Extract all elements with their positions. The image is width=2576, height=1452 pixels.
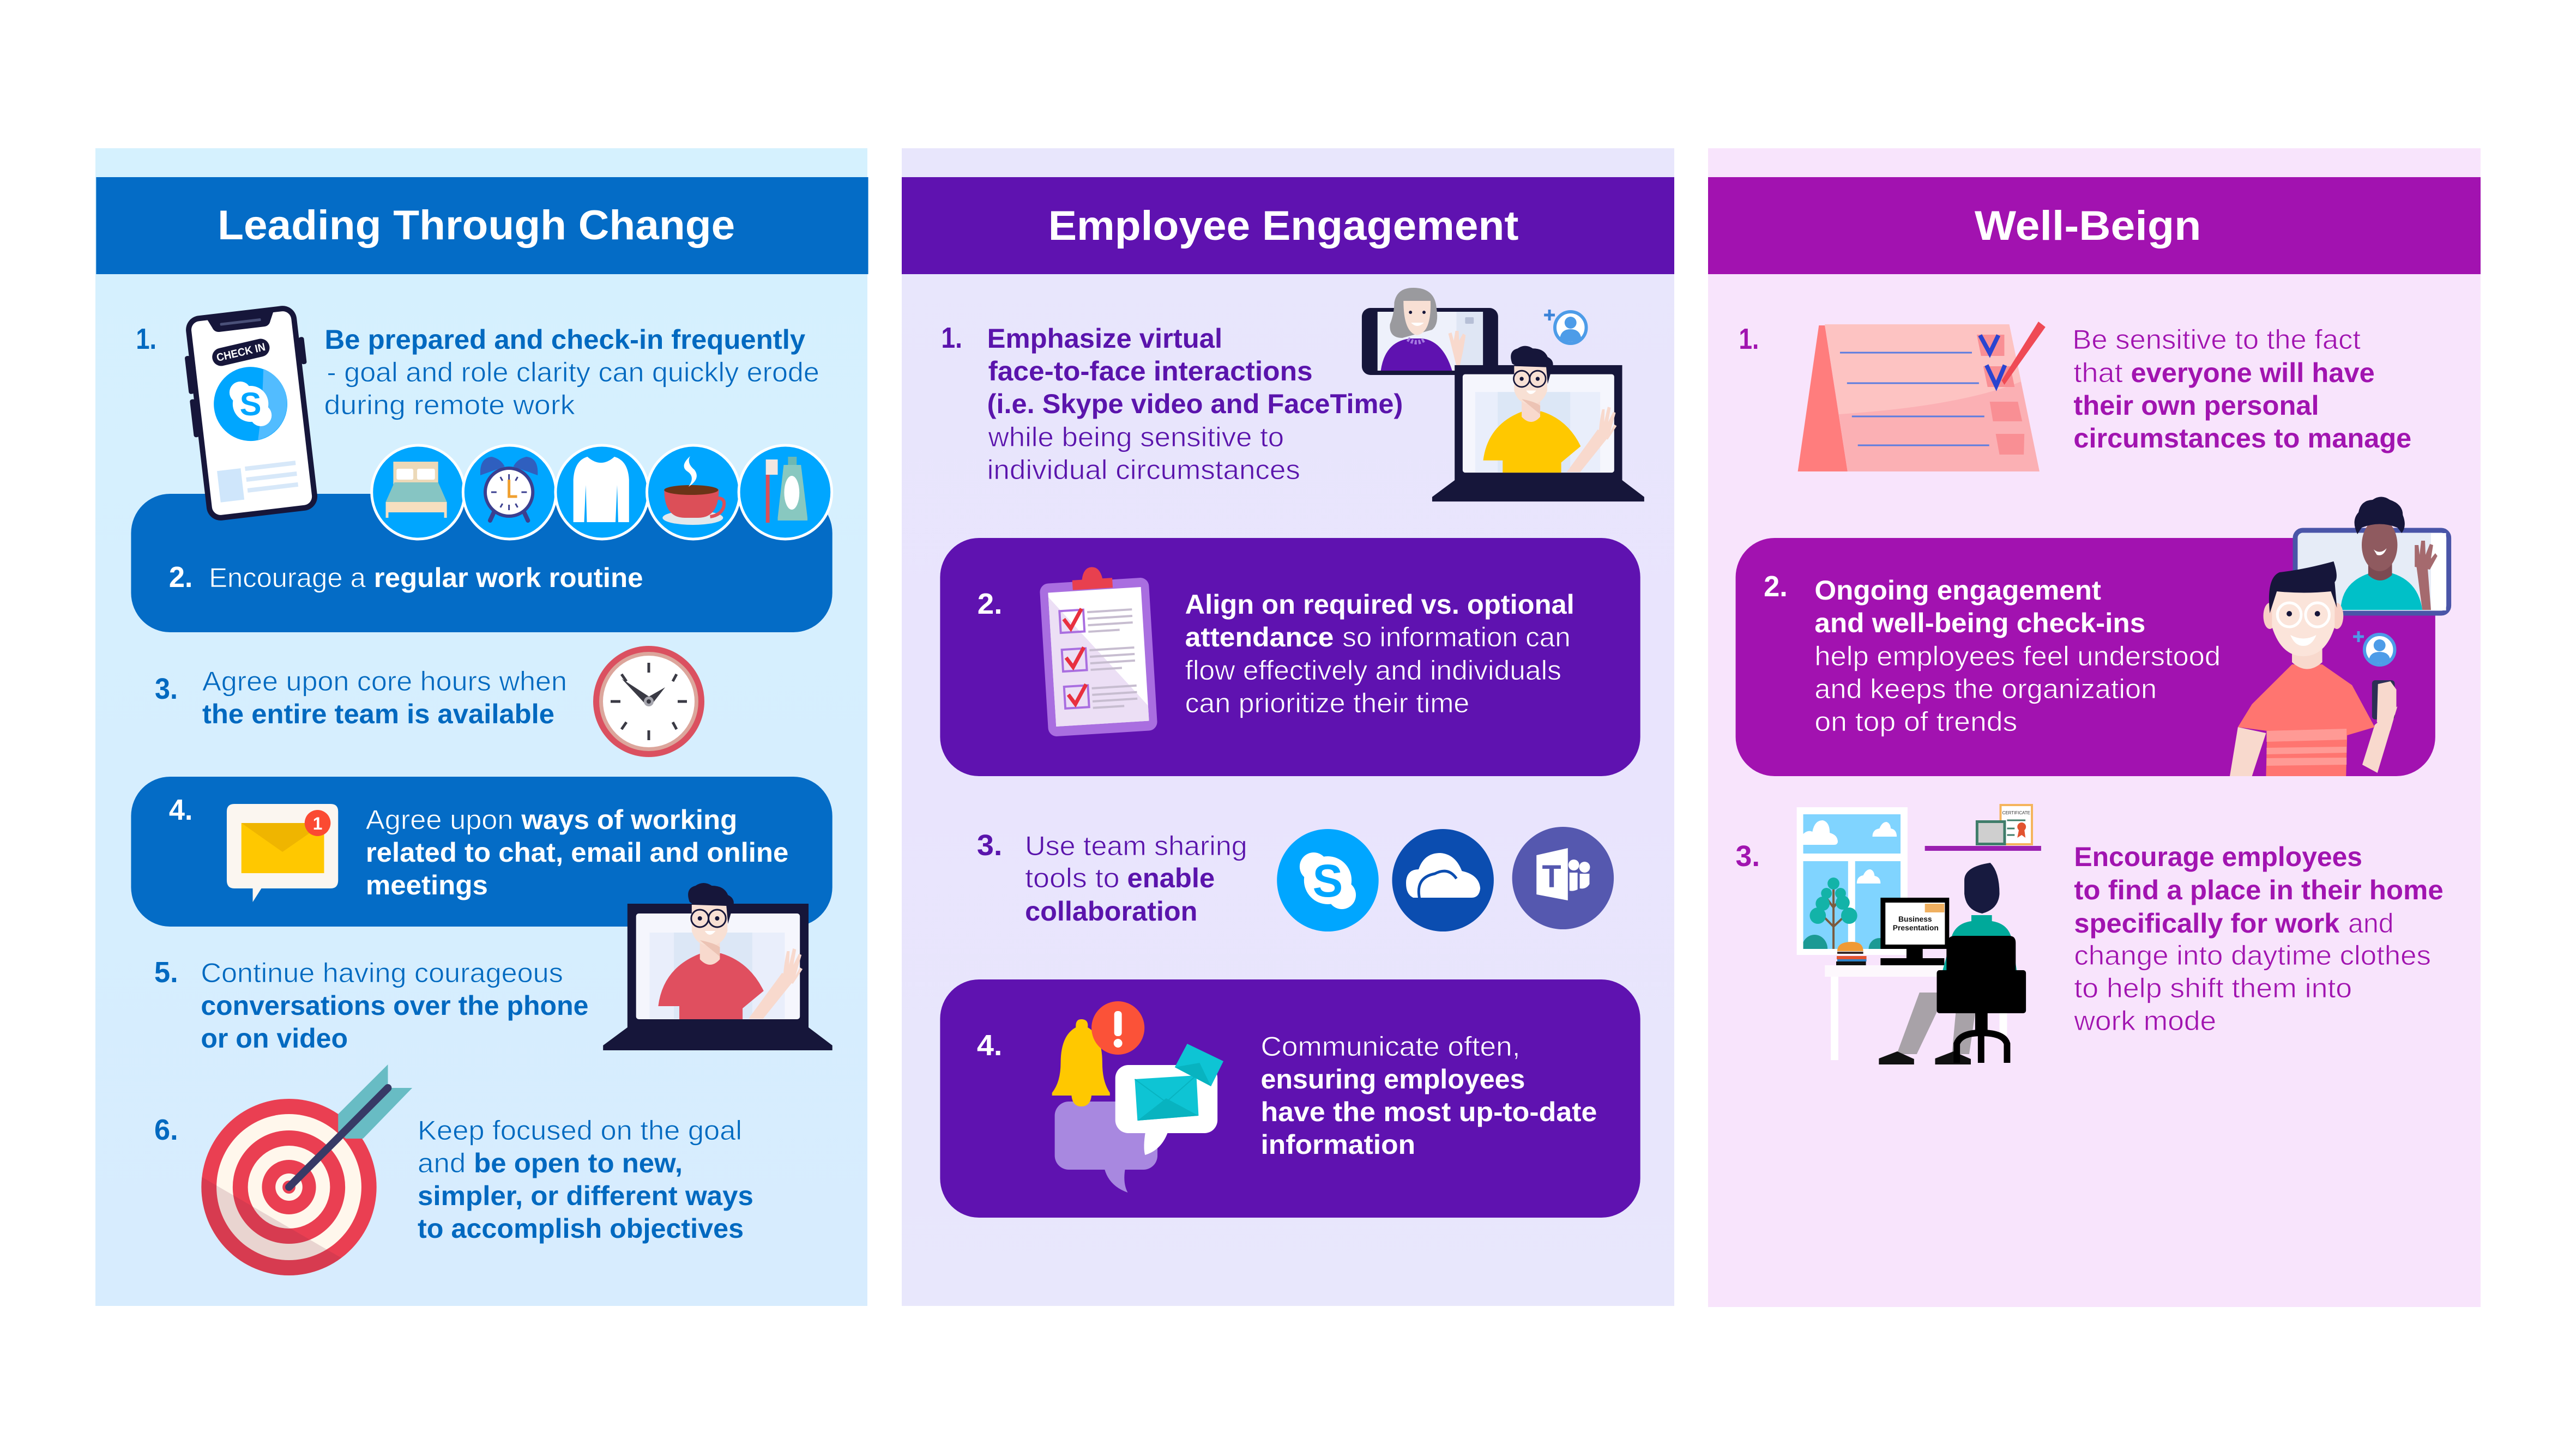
item 1 text (987, 323, 1403, 485)
icon: microsoft teams (1512, 827, 1614, 929)
icon: tablet video call (2295, 497, 2449, 613)
item 2 number: 2. (1764, 570, 1788, 603)
icon: skype (1277, 829, 1379, 931)
item 1 text: while being sensitive to (988, 422, 1284, 452)
item 4 text: related to chat, email and online (366, 837, 788, 868)
item 3 text: specifically for work (2074, 908, 2340, 939)
item 2 text: Encourage a (209, 562, 366, 593)
icon: onedrive (1392, 829, 1494, 931)
item 3 text: and (2348, 908, 2393, 939)
item 4 text (1260, 1031, 1597, 1160)
icon: alarm clock (463, 445, 556, 539)
heading: Leading Through Change (218, 202, 735, 249)
item 2 text: can prioritize their time (1185, 688, 1469, 718)
item 2 text: attendance (1185, 622, 1334, 652)
item 2 text (1185, 589, 1574, 718)
column contents (96, 177, 868, 1278)
item 3 text: change into daytime clothes (2074, 940, 2431, 971)
item 4 number: 4. (977, 1029, 1002, 1062)
item 3 text: the entire team is available (202, 699, 554, 729)
item 3 text (202, 666, 567, 729)
item 5 number: 5. (154, 956, 178, 989)
item 4 text: information (1260, 1129, 1415, 1160)
item 1 text: Be prepared and check-in frequently (324, 324, 805, 355)
item 3 text: to find a place in their home (2074, 875, 2444, 905)
icon: coffee cup (647, 445, 740, 539)
item 2 text: flow effectively and individuals (1185, 655, 1561, 686)
item 2 box (940, 538, 1640, 776)
icon: toothbrush and toothpaste (739, 445, 832, 539)
item 1 text: their own personal (2073, 390, 2319, 421)
item 5 text: or on video (201, 1023, 348, 1054)
item 3 text (1025, 831, 1247, 927)
item 4 text: Communicate often, (1260, 1031, 1521, 1062)
item 1 number: 1. (941, 322, 962, 354)
item 1 text: everyone will have (2131, 358, 2375, 388)
item 1 text: Be sensitive to the fact (2072, 324, 2361, 355)
item 5 text: Continue having courageous (201, 958, 563, 988)
item 1 text: individual circumstances (987, 455, 1300, 485)
item 6 text: simpler, or different ways (418, 1181, 753, 1211)
item 6 text: Keep focused on the goal (418, 1115, 742, 1146)
item 4 text: ways of working (521, 804, 737, 835)
heading: Employee Engagement (1048, 203, 1519, 249)
item 2 text (209, 562, 643, 593)
column contents (1736, 203, 2449, 1064)
item 3 number: 3. (155, 673, 178, 705)
item 2 box (131, 494, 832, 632)
item 1 text (2072, 324, 2411, 453)
icon: email notification: 1 (313, 814, 322, 833)
item 1 text (324, 324, 819, 420)
icon: bed (372, 445, 464, 539)
item 2 box (1736, 538, 2435, 776)
icon: home office scene: CERTIFICATE (2002, 810, 2030, 815)
icon: tablet video call with woman (1362, 288, 1498, 376)
icon: wall clock (593, 646, 704, 757)
column contents (940, 203, 1644, 1218)
item 2 text: and well-being check-ins (1814, 608, 2145, 638)
panel: Well-Being (1708, 148, 2481, 1307)
item 2 text: Ongoing engagement (1814, 575, 2101, 606)
item 6 number: 6. (154, 1114, 178, 1146)
item 3 number: 3. (1736, 840, 1760, 873)
item 4 text: ensuring employees (1260, 1064, 1525, 1094)
item 2 text: and keeps the organization (1814, 674, 2157, 704)
icon: add user (1544, 310, 1586, 343)
header band (1708, 177, 2481, 274)
item 5 text (201, 958, 588, 1054)
item 2 text (1814, 575, 2221, 737)
icon: desk calendar checklist (1798, 322, 2046, 471)
item 4 text (366, 804, 788, 900)
header band (902, 177, 1674, 274)
item 1 text: that (2073, 358, 2123, 388)
item 1 text: (i.e. Skype video and FaceTime) (987, 389, 1403, 419)
icon: microsoft teams: T (1542, 860, 1561, 894)
item 3 text: enable (1127, 863, 1215, 893)
item 4 text: meetings (366, 870, 488, 900)
item 3 text: work mode (2073, 1006, 2216, 1036)
item 3 text: collaboration (1025, 896, 1197, 927)
icon row: daily routine (372, 445, 832, 539)
item 1 text: - goal and role clarity can quickly erode (327, 357, 819, 388)
icon: notifications and messages (1052, 1001, 1223, 1193)
icon: skype: S (1313, 855, 1343, 906)
item 6 text: be open to new, (474, 1148, 683, 1178)
item 1 text: face-to-face interactions (988, 356, 1313, 386)
item 1 text: Emphasize virtual (987, 323, 1222, 354)
header band (96, 177, 868, 274)
icon: phone with check-in (180, 304, 324, 523)
item 6 text (418, 1115, 753, 1244)
item 1 number: 1. (1739, 323, 1759, 355)
item 2 text: Align on required vs. optional (1185, 589, 1574, 620)
icon: man in coral shirt with phone (2230, 561, 2397, 776)
item 3 text: Use team sharing (1025, 831, 1247, 861)
item 3 text (2073, 842, 2444, 1036)
check-in label: CHECK IN (215, 341, 267, 364)
item 3 text: to help shift them into (2074, 973, 2352, 1003)
item 3 text: tools to (1025, 863, 1120, 893)
item 2 number: 2. (978, 588, 1002, 620)
item 5 text: conversations over the phone (201, 990, 588, 1021)
panel background (95, 148, 867, 1306)
icon: target with arrow (201, 1064, 412, 1278)
panel background (1708, 148, 2481, 1307)
icon: skype logo on phone (230, 382, 272, 426)
item 1 text: during remote work (324, 390, 575, 420)
item 2 text: so information can (1342, 622, 1571, 652)
item 2 text: regular work routine (374, 562, 643, 593)
item 1 number: 1. (136, 323, 156, 355)
icon: laptop video call with man in yellow shirt (1432, 346, 1644, 501)
item 6 text: and (418, 1148, 466, 1178)
item 4 text: have the most up-to-date (1260, 1097, 1597, 1127)
panel background (902, 148, 1674, 1306)
item 3 text: Agree upon core hours when (202, 666, 567, 697)
item 1 text: circumstances to manage (2073, 423, 2411, 453)
icon: shirt (556, 445, 649, 539)
heading: Well-Beign (1975, 203, 2201, 249)
item 2 text: on top of trends (1814, 706, 2017, 737)
item 6 text: to accomplish objectives (418, 1213, 744, 1244)
item 3 number: 3. (977, 829, 1002, 862)
icon: home office scene: Business (1898, 915, 1932, 923)
item 4 text: Agree upon (366, 804, 514, 835)
panel: Employee Engagement (902, 148, 1674, 1306)
icon: home office scene (1797, 804, 2041, 1064)
item 2 number: 2. (169, 561, 192, 594)
icon: home office scene: Presentation (1893, 923, 1939, 932)
icon: laptop video call with man in red shirt (603, 883, 832, 1050)
icon: clipboard checklist (1039, 564, 1157, 737)
icon: email notification (227, 804, 338, 902)
item 3 text: Encourage employees (2074, 842, 2362, 872)
panel: Leading Through Change (95, 148, 868, 1306)
icon: skype logo on phone: S (240, 386, 261, 422)
item 4 box (131, 777, 832, 927)
item 4 number: 4. (169, 794, 192, 826)
item 2 text: help employees feel understood (1814, 641, 2221, 671)
check-in pill (210, 337, 272, 368)
item 4 box (940, 979, 1640, 1218)
